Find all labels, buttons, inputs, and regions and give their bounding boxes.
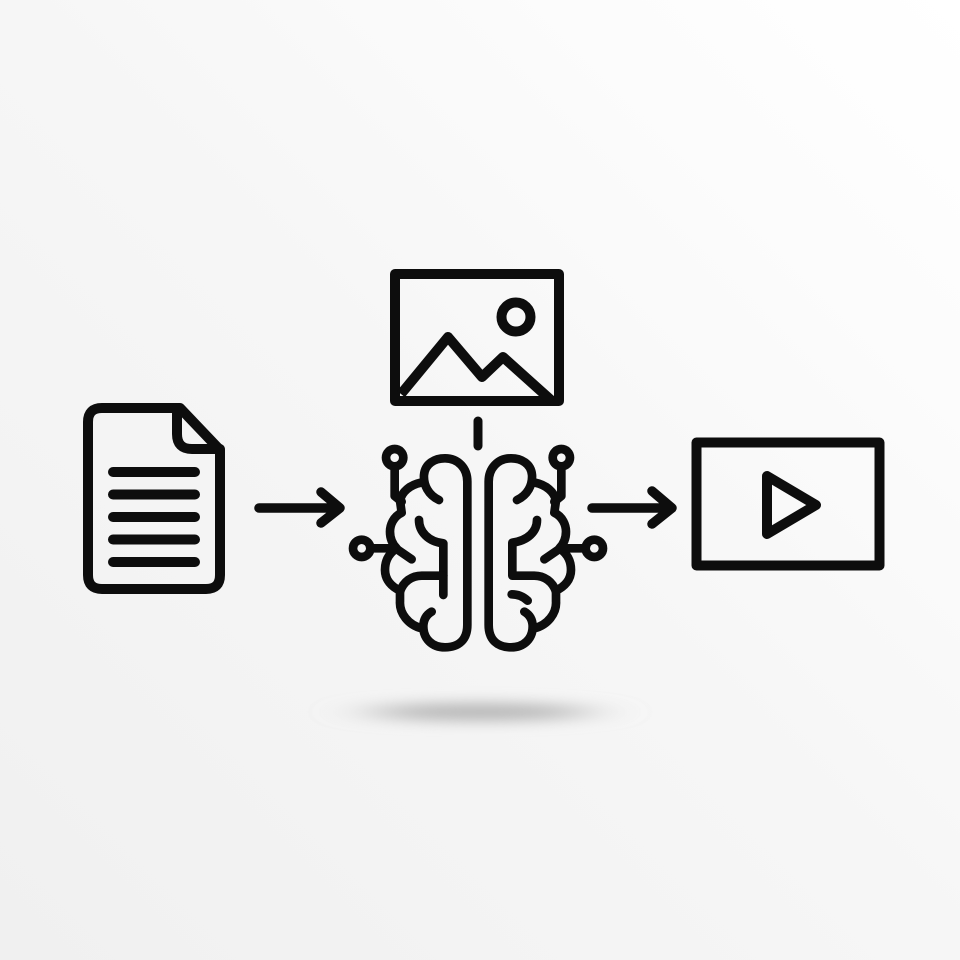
play triangle [767, 476, 816, 534]
right side circuit node [586, 540, 603, 557]
arrow: brain to video [592, 491, 672, 524]
right hemisphere small fold [512, 594, 528, 601]
left top circuit node [386, 449, 403, 466]
icon: image [395, 274, 559, 401]
connector: image to brain [474, 421, 482, 446]
ground shadow [368, 703, 592, 721]
icon: document [88, 408, 220, 589]
arrow: document to brain [259, 492, 340, 523]
document text lines [113, 472, 195, 562]
icon: video player [696, 442, 880, 566]
icon: brain with circuit nodes [353, 449, 603, 647]
image sun [502, 302, 530, 332]
image mountains [401, 337, 552, 401]
left side circuit node [353, 540, 370, 557]
right hemisphere [489, 449, 603, 647]
left hemisphere [353, 449, 467, 647]
right top circuit node [553, 449, 570, 466]
